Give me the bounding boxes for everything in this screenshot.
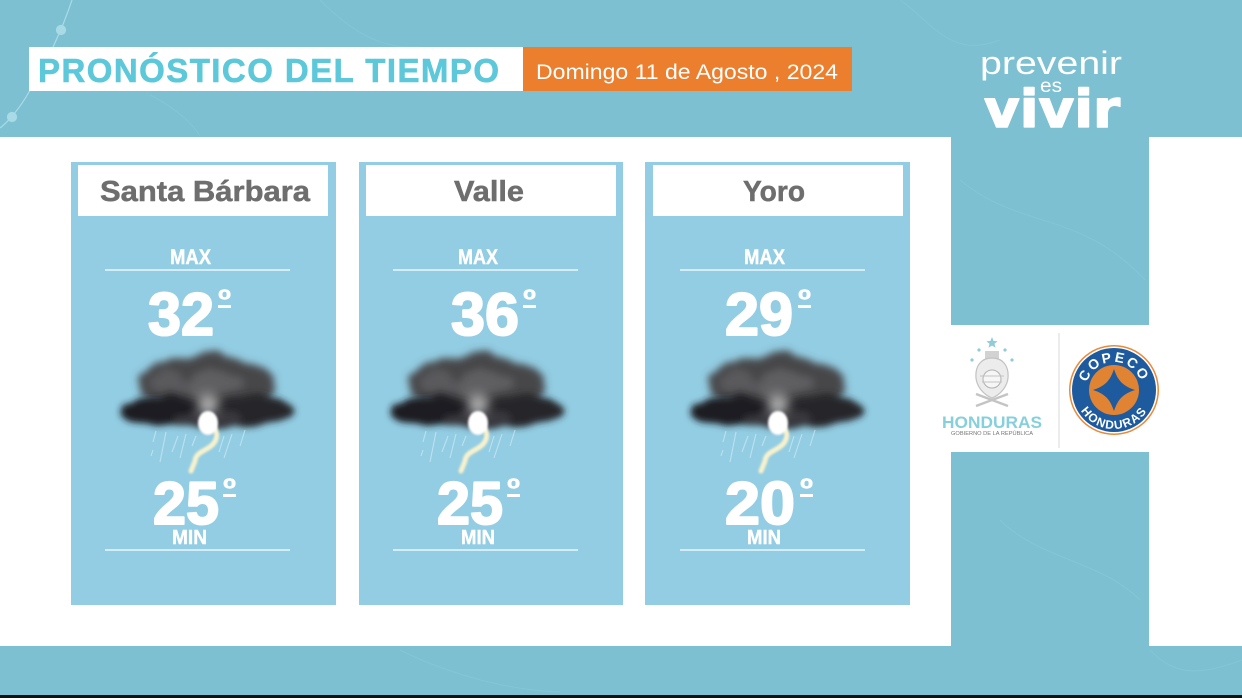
panel: Yoro: º	[800, 473, 813, 506]
logo subtext: government: GOBIERNO DE LA REPÚBLICA	[951, 430, 1034, 437]
department name	[78, 165, 328, 216]
panel: Valle	[359, 162, 623, 605]
panel: Valle: º	[507, 473, 520, 506]
date: Domingo 11 de Agosto , 2024	[536, 61, 838, 84]
min temperature: 20	[725, 470, 795, 537]
min label: MIN	[461, 527, 495, 549]
bottom black edge	[0, 695, 1242, 698]
logo: prevenir es vivir: vivir	[984, 80, 1120, 140]
logo: prevenir es vivir: es	[1040, 76, 1062, 97]
panel: Valle: Valle	[454, 176, 524, 208]
logos panel	[942, 325, 1159, 452]
department name	[653, 165, 903, 216]
panel: Valle: º	[523, 284, 536, 317]
logo: prevenir es vivir: prevenir	[980, 45, 1122, 81]
title box	[29, 47, 523, 91]
white main band	[0, 137, 951, 646]
min label: MIN	[747, 527, 781, 549]
min temperature: 25	[153, 470, 219, 537]
panel: Santa Bárbara: º	[218, 284, 231, 317]
date box	[523, 47, 852, 91]
logo: prevenir es vivir	[980, 45, 1122, 140]
logo: COPECO	[1069, 345, 1159, 435]
logo: COPECO: COPECO	[1080, 352, 1148, 380]
panel: Yoro: º	[798, 284, 811, 317]
panel background	[71, 162, 336, 605]
white right band	[1149, 137, 1242, 646]
icon: thunderstorm cloud	[391, 354, 564, 471]
logo: Honduras crest	[970, 337, 1014, 406]
panel: Santa Bárbara: º	[223, 473, 236, 506]
min label: MIN	[172, 527, 207, 549]
icon: thunderstorm cloud	[121, 354, 294, 471]
panel: Santa Bárbara	[71, 162, 336, 605]
max temperature: 36	[451, 281, 519, 348]
logo: COPECO: HONDURAS	[1081, 406, 1146, 429]
title bar	[29, 47, 852, 91]
max temperature: 29	[725, 281, 793, 348]
panel: Santa Bárbara: Santa Bárbara	[100, 176, 311, 208]
max label: MAX	[458, 246, 498, 269]
panel: Yoro	[645, 162, 910, 605]
department name	[366, 165, 616, 216]
max temperature: 32	[148, 281, 214, 348]
panel background	[359, 162, 623, 605]
max label: MAX	[744, 246, 785, 269]
logos background	[951, 325, 1149, 452]
max label: MAX	[170, 246, 211, 269]
logo text: Honduras: HONDURAS	[942, 413, 1042, 432]
panel background	[645, 162, 910, 605]
icon: thunderstorm cloud	[691, 354, 864, 471]
min temperature: 25	[437, 470, 503, 537]
panel: Yoro: Yoro	[743, 176, 805, 208]
decorative curve with dots	[0, 0, 72, 128]
title: PRONÓSTICO DEL TIEMPO	[38, 52, 499, 89]
